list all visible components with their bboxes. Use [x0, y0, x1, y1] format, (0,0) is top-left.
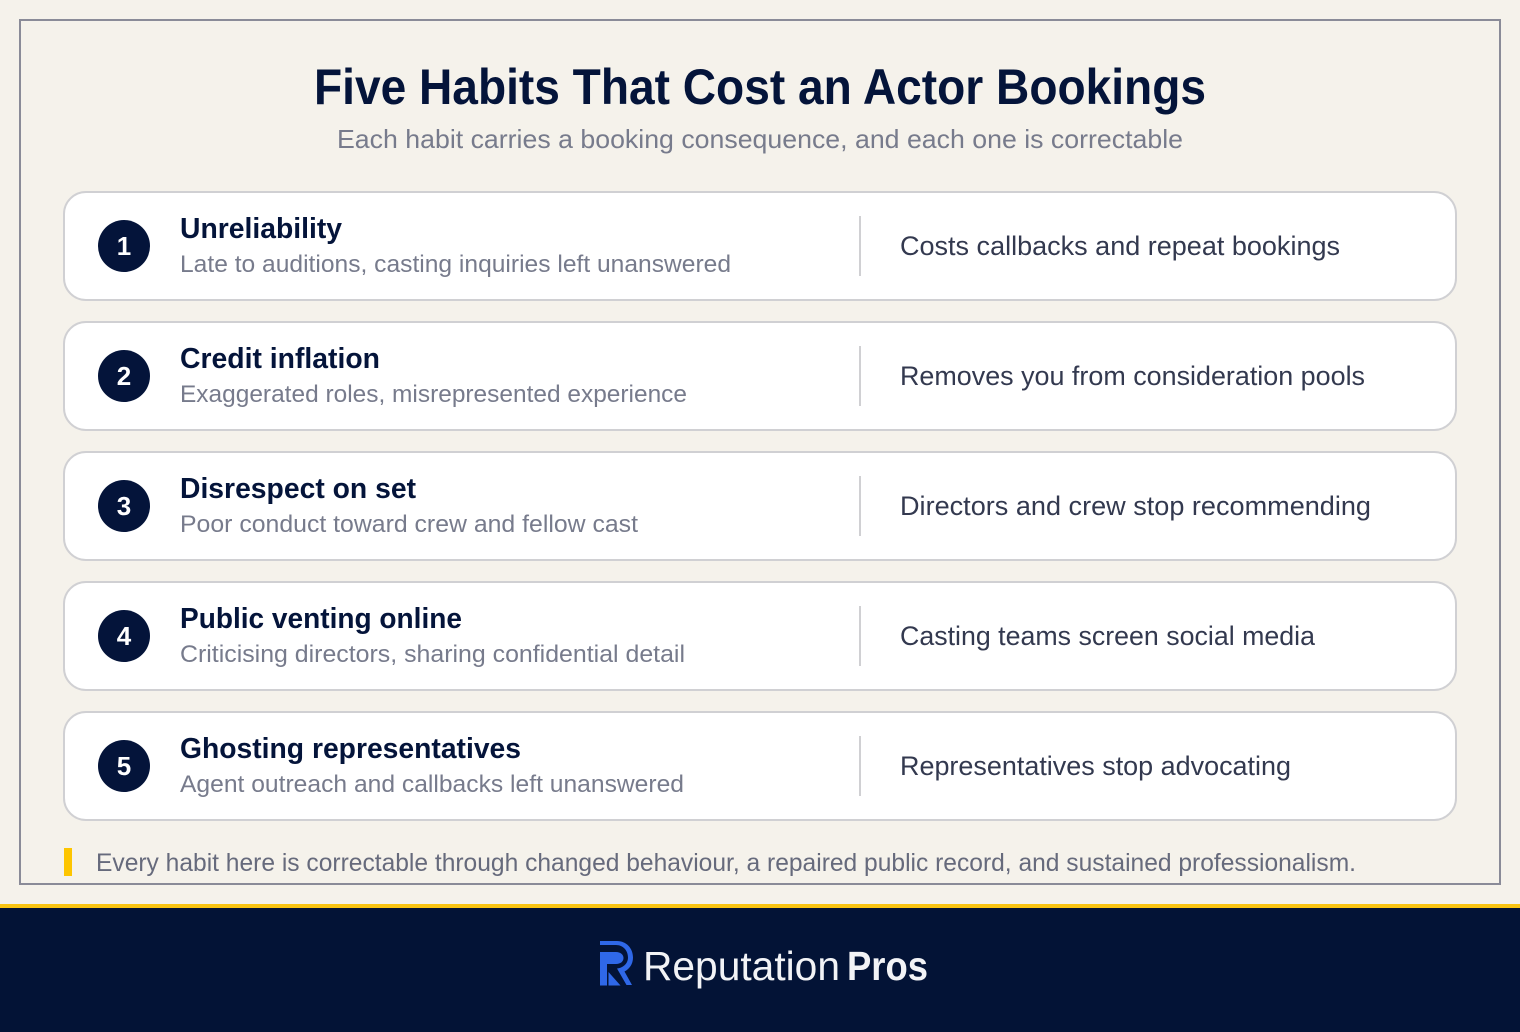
habit name: Public venting online — [180, 603, 462, 635]
title: Five Habits That Cost an Actor Bookings — [314, 59, 1206, 115]
number badge 5 — [98, 740, 150, 792]
panel: habit 1 — [64, 192, 1456, 300]
consequence: Removes you from consideration pools — [900, 361, 1365, 391]
number badge 1: 1 — [117, 231, 131, 261]
subtitle: Each habit carries a booking consequence, and each one is correctable — [337, 124, 1183, 154]
logo: Pros — [847, 943, 928, 989]
habit description: Criticising directors, sharing confidential detail — [180, 641, 685, 668]
panel: habit 2 — [64, 322, 1456, 430]
habit description: Agent outreach and callbacks left unanswered — [180, 771, 684, 798]
number badge 5: 5 — [117, 751, 131, 781]
habit name: Disrespect on set — [180, 473, 416, 505]
consequence: Casting teams screen social media — [900, 621, 1315, 651]
callout text: Every habit here is correctable through changed behaviour, a repaired public record, and sustained professionalism. — [96, 849, 1356, 877]
habit description: Late to auditions, casting inquiries left unanswered — [180, 251, 731, 278]
number badge 4 — [98, 610, 150, 662]
number badge 1 — [98, 220, 150, 272]
habit description: Poor conduct toward crew and fellow cast — [180, 511, 638, 538]
panel: habit 5 — [64, 712, 1456, 820]
number badge 3 — [98, 480, 150, 532]
consequence: Representatives stop advocating — [900, 751, 1291, 781]
icon: R mark — [600, 941, 633, 986]
logo — [600, 941, 928, 989]
consequence: Directors and crew stop recommending — [900, 491, 1371, 521]
habit name: Ghosting representatives — [180, 733, 521, 765]
number badge 3: 3 — [117, 491, 131, 521]
callout accent bar — [64, 848, 72, 876]
footer band — [0, 904, 1520, 1032]
number badge 2 — [98, 350, 150, 402]
number badge 2: 2 — [117, 361, 131, 391]
habit name: Unreliability — [180, 213, 342, 245]
number badge 4: 4 — [117, 621, 132, 651]
habit name: Credit inflation — [180, 343, 380, 375]
panel: habit 3 — [64, 452, 1456, 560]
panel: habit 4 — [64, 582, 1456, 690]
consequence: Costs callbacks and repeat bookings — [900, 231, 1340, 261]
wordmark: Reputation — [643, 943, 840, 989]
habit description: Exaggerated roles, misrepresented experience — [180, 381, 687, 408]
